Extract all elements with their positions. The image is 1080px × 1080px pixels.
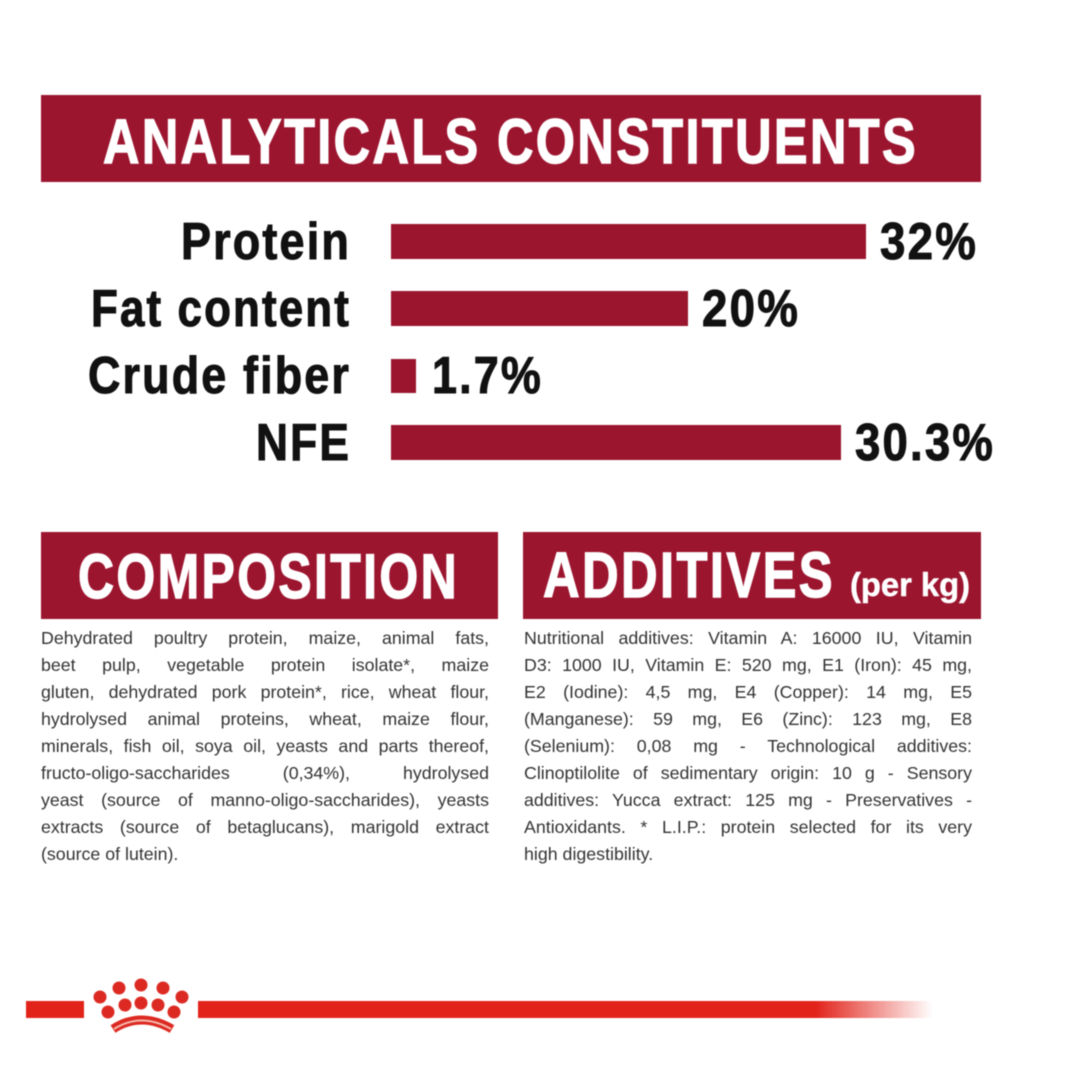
text block: additives: (Selenium): 0,08 mg - Technological additives: [524,736,972,756]
text block: additives: additives: Yucca extract: 125 mg - Preservatives - [524,790,972,810]
panel: composition header [41,532,498,619]
bar row: fat content: 20% [702,280,800,338]
text block: additives: high digestibility. [524,844,653,864]
text block: additives: E2 (Iodine): 4,5 mg, E4 (Copper): 14 mg, E5 [524,682,972,702]
bar row: fat content [91,280,800,338]
text block: composition: gluten, dehydrated pork protein*, rice, wheat flour, [41,682,489,702]
panel: composition header: COMPOSITION [78,542,459,612]
text block: composition: beet pulp, vegetable protein isolate*, maize [41,655,489,675]
text block: additives: Antioxidants. * L.I.P.: protein selected for its very [524,817,972,837]
bar row: NFE [256,414,995,472]
text block: additives: (Manganese): 59 mg, E6 (Zinc): 123 mg, E8 [524,709,972,729]
text block: composition [40,628,490,864]
bar row: NFE: 30.3% [855,414,995,472]
panel: analyticals constituents header [41,95,981,182]
text block: composition: Dehydrated poultry protein, maize, animal fats, [41,628,489,648]
panel: additives header [523,532,981,619]
text block: composition: minerals, fish oil, soya oil, yeasts and parts thereof, [41,736,489,756]
bar row: crude fiber: 1.7% [432,347,543,405]
panel: additives header: (per kg) [850,566,970,603]
text block: additives [524,628,972,864]
bar row: protein: 32% [880,213,978,271]
text block: composition: hydrolysed animal proteins, wheat, maize flour, [41,709,489,729]
text block: composition: extracts (source of betaglucans), marigold extract [41,817,489,837]
text block: additives: D3: 1000 IU, Vitamin E: 520 mg, E1 (Iron): 45 mg, [524,655,972,675]
text block: composition: fructo-oligo-saccharides (0,34%), hydrolysed [41,763,489,783]
footer: red line left [26,1001,84,1018]
bar row: protein: Protein [181,213,351,271]
panel: additives header: ADDITIVES [543,539,835,611]
text block: composition: (source of lutein). [41,844,178,864]
text block: additives: Clinoptilolite of sedimentary origin: 10 g - Sensory [524,763,972,783]
bar row: NFE: NFE [256,414,351,472]
bar row: fat content: Fat content [91,280,351,338]
bar row: protein [181,213,978,271]
text block: composition: yeast (source of manno-oligo-saccharides), yeasts [41,790,489,810]
bar chart: analytical constituents [88,213,995,472]
icon: royal crown logo [94,978,188,1029]
footer: red line right with fade [198,1001,933,1018]
bar row: crude fiber: Crude fiber [88,347,351,405]
bar row: crude fiber [88,347,543,405]
text block: additives: Nutritional additives: Vitamin A: 16000 IU, Vitamin [524,628,972,648]
